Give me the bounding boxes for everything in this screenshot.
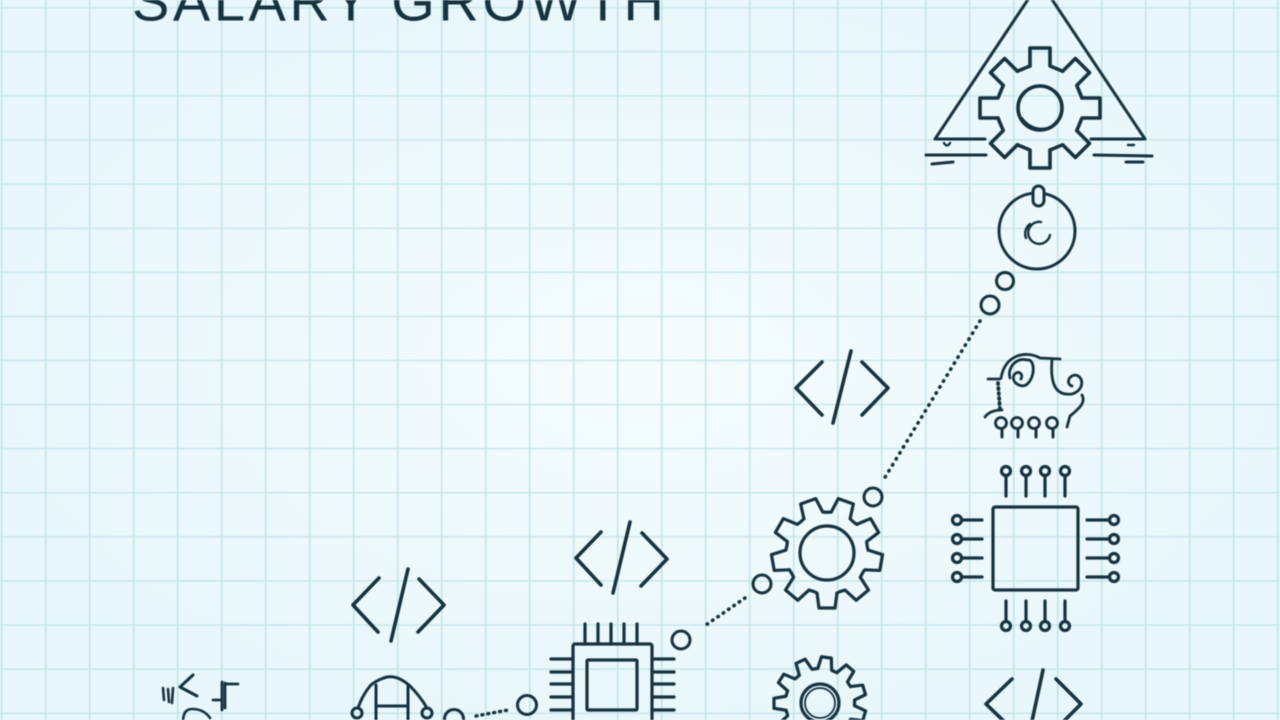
icon: code tag bottom right	[986, 670, 1081, 720]
progress path: lower dots	[444, 696, 536, 720]
icon: large chip	[952, 466, 1118, 630]
icon: code tag centre	[576, 522, 667, 593]
icon: medium gear	[770, 495, 884, 608]
icon: robot figure	[352, 677, 432, 720]
icon: small gear	[774, 656, 868, 720]
icon: doodle bottom left	[163, 675, 238, 720]
icon: circle with knob	[999, 186, 1075, 269]
triangle outline	[935, 0, 1145, 139]
ground strokes	[926, 155, 1152, 164]
small feet	[944, 143, 1134, 146]
large gear	[980, 48, 1100, 168]
icon: triangle with gear	[926, 0, 1152, 168]
icon: code tag upper	[796, 351, 888, 423]
progress path: upper dots	[864, 272, 1014, 506]
icon: chip with pins	[551, 624, 674, 720]
progress path: middle dots	[672, 575, 771, 649]
icon: elephant doodle	[985, 354, 1083, 437]
icon: code tag left	[353, 569, 444, 641]
